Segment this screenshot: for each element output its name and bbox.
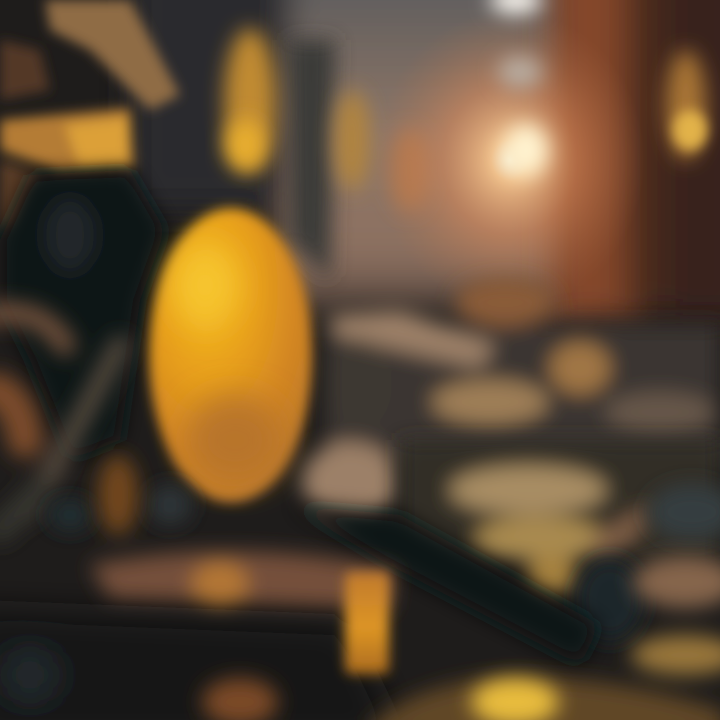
light glow: central sun [375, 10, 645, 310]
table objects, middle right [302, 278, 720, 522]
light spots [490, 0, 548, 176]
left brown strands [0, 313, 120, 530]
orange candle [345, 572, 389, 674]
background: misty upper centre [130, 0, 580, 310]
bottom right plates [202, 556, 720, 720]
stack of glowing plates [400, 440, 720, 595]
window glow: right lamp [673, 110, 707, 150]
background: glowing orange right wall [550, 0, 720, 320]
glowing windows [224, 28, 706, 212]
background: dark pillar [288, 40, 335, 280]
bright yellow bowl [471, 678, 559, 720]
window glow: left bright core [225, 119, 265, 171]
blue-grey objects at right [48, 484, 720, 642]
orange table band [90, 455, 395, 610]
bottom dark base [0, 610, 400, 720]
dark diagonal tube [290, 505, 600, 665]
golden egg [149, 208, 313, 502]
top-left shapes [0, 0, 180, 230]
dark figure at left [0, 170, 165, 460]
